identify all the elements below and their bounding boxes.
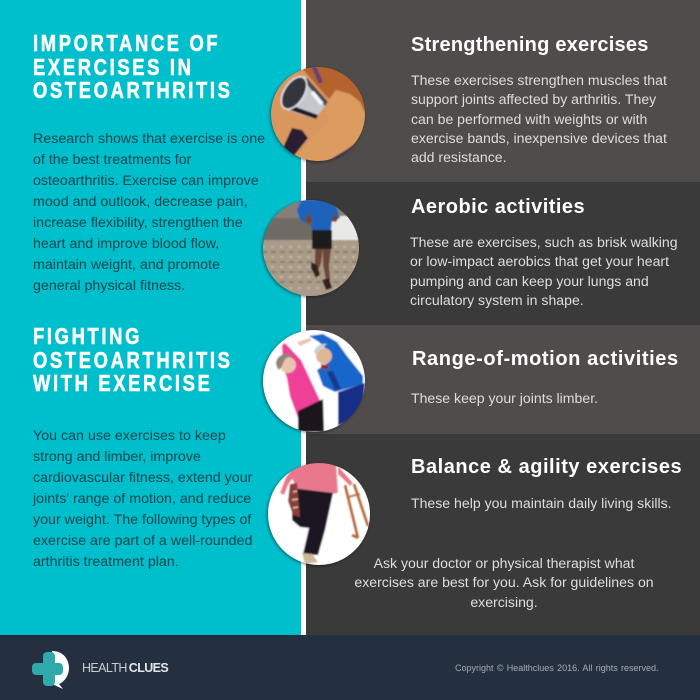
text block: research paragraph: of the best treatments for [33,152,191,168]
text block: exercise paragraph: exercise are part of a well-rounded [33,533,252,549]
heading: importance of exercises: IMPORTANCE OF [33,30,220,56]
heading: importance of exercises [33,30,232,103]
text block: exercise paragraph: cardiovascular fitness, extend your [33,470,252,486]
text block: strengthening description [411,72,667,165]
heading: aerobic activities: Aerobic activities [411,196,585,218]
panel: aerobic band [306,182,700,325]
footer [0,635,700,700]
text block: exercise paragraph: You can use exercises to keep [33,428,226,444]
panel: teal left column [0,0,301,635]
text block: research paragraph: mood and outlook, decrease pain, [33,194,248,210]
heading: importance of exercises: OSTEOARTHRITIS [33,77,232,103]
text block: research paragraph [33,131,265,294]
text block: closing advice [354,555,654,610]
text block: balance description: These help you maintain daily living skills. [411,495,672,511]
panel: white divider [301,0,306,635]
heading: strengthening exercises: Strengthening exercises [411,34,649,56]
heading: fighting osteoarthritis [32,323,232,396]
text block: strengthening description: These exercises strengthen muscles that [411,72,667,88]
text block: exercise paragraph: strong and limber, improve [33,449,201,465]
text block: closing advice: exercises are best for you. Ask for guidelines on [354,574,654,590]
photo circles [260,67,370,567]
text block: range-of-motion description: These keep your joints limber. [411,390,598,406]
text block: aerobic description: circulatory system in shape. [410,292,584,308]
text block: closing advice: exercising. [470,594,538,610]
icon: standing leg stretch photo [267,462,371,566]
heading: balance and agility exercises: Balance & agility exercises [411,456,682,478]
text block: strengthening description: can be performed with weights or with [411,111,647,127]
icon: stretching seniors photo [262,329,366,433]
icon: dumbbell in hand photo [268,67,365,163]
text block: aerobic description: pumping and can keep your lungs and [410,273,649,289]
heading: fighting osteoarthritis: OSTEOARTHRITIS [33,346,232,372]
text block: exercise paragraph [32,428,252,570]
heading: fighting osteoarthritis: WITH EXERCISE [33,370,212,396]
text block: exercise paragraph: your weight. The following types of [33,512,251,528]
text block: strengthening description: exercise bands, inexpensive devices that [411,130,667,146]
text block: research paragraph: Research shows that exercise is one [33,131,265,147]
text block: aerobic description: These are exercises, such as brisk walking [410,234,678,250]
text block: research paragraph: general physical fitness. [33,278,185,294]
text block: aerobic description [410,234,678,308]
icon: health clues logo [32,651,69,689]
text block: aerobic description: or low-impact aerobics that get your heart [410,253,669,269]
text block: strengthening description: add resistance. [411,149,506,165]
text block: research paragraph: maintain weight, and promote [33,257,220,273]
text block: strengthening description: support joints affected by arthritis. They [411,91,656,107]
text block: research paragraph: heart and improve blood flow, [33,236,219,252]
icon: runner on beach photo [262,199,362,300]
text block: exercise paragraph: joints' range of motion, and reduce [33,491,251,507]
heading: fighting osteoarthritis: FIGHTING [33,323,142,349]
text block: closing advice: Ask your doctor or physical therapist what [374,555,634,571]
panel: range-of-motion band [306,325,700,434]
text block: research paragraph: increase flexibility, strengthen the [33,215,243,231]
heading: range-of-motion activities: Range-of-motion activities [412,348,679,370]
text block: exercise paragraph: arthritis treatment plan. [33,554,179,570]
panel: strengthening band [306,0,700,182]
heading: importance of exercises: EXERCISES IN [33,54,194,80]
copyright: Copyright © Healthclues 2016. All rights reserved. [455,663,659,673]
text block: research paragraph: osteoarthritis. Exercise can improve [33,173,259,189]
panel: balance band [306,434,700,635]
logo wordmark: HEALTHCLUES [82,661,168,675]
